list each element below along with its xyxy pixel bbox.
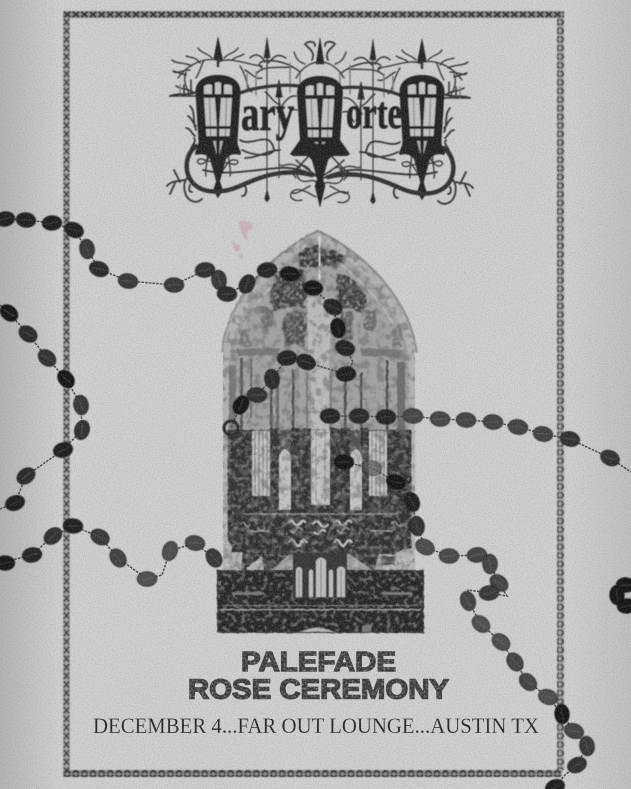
lantern M right — [399, 75, 445, 190]
organ base plinth — [217, 570, 424, 633]
church organ illustration — [217, 228, 424, 633]
red ink smudge — [231, 221, 254, 258]
rosary beads — [0, 210, 631, 789]
headliner: PALEFADE — [241, 646, 396, 677]
organ pipe highlights — [252, 430, 387, 510]
chain: strand to right edge — [330, 416, 631, 472]
organ lower storey dark towers — [228, 428, 411, 572]
beads: strand to right edge — [320, 408, 622, 469]
organ light mottling — [220, 430, 420, 572]
organ balustrade carvings — [231, 514, 410, 572]
beads: lower left strand — [0, 518, 225, 586]
organ arch base — [222, 230, 416, 572]
organ mid storey columns — [229, 348, 405, 442]
organ dark mottling — [220, 228, 420, 574]
beads: left loop — [0, 301, 92, 513]
organ lower storey underlay — [228, 430, 411, 572]
band logo: gothic ironwork lanterns — [167, 37, 473, 207]
decorative border frame — [63, 11, 564, 777]
beads: upper strand — [0, 210, 357, 435]
right half of ironwork, mirrored — [324, 39, 473, 204]
organ central light column — [307, 236, 334, 430]
chain: lower left strand — [0, 526, 214, 579]
chain: left loop — [0, 305, 82, 509]
support act: ROSE CEREMONY — [188, 674, 449, 704]
beads: right edge cluster — [610, 577, 631, 614]
beads: descending strand — [334, 454, 596, 789]
organ plinth centre pipes — [293, 553, 347, 598]
chain: descending strand — [344, 462, 587, 787]
logo lettering right: orte — [346, 87, 402, 138]
lantern M centre — [290, 76, 350, 191]
organ plinth mouldings — [220, 592, 421, 632]
logo lettering left: ary — [241, 85, 294, 141]
rosary chains — [0, 219, 631, 787]
centre spire and scrolls — [292, 38, 348, 207]
chain: upper strand over organ — [0, 219, 353, 428]
event date and venue: DECEMBER 4...FAR OUT LOUNGE...AUSTIN TX — [93, 713, 539, 738]
lantern M left — [195, 75, 241, 190]
band names — [188, 646, 449, 704]
left half of ironwork — [167, 37, 316, 202]
organ dark vault — [240, 246, 402, 346]
